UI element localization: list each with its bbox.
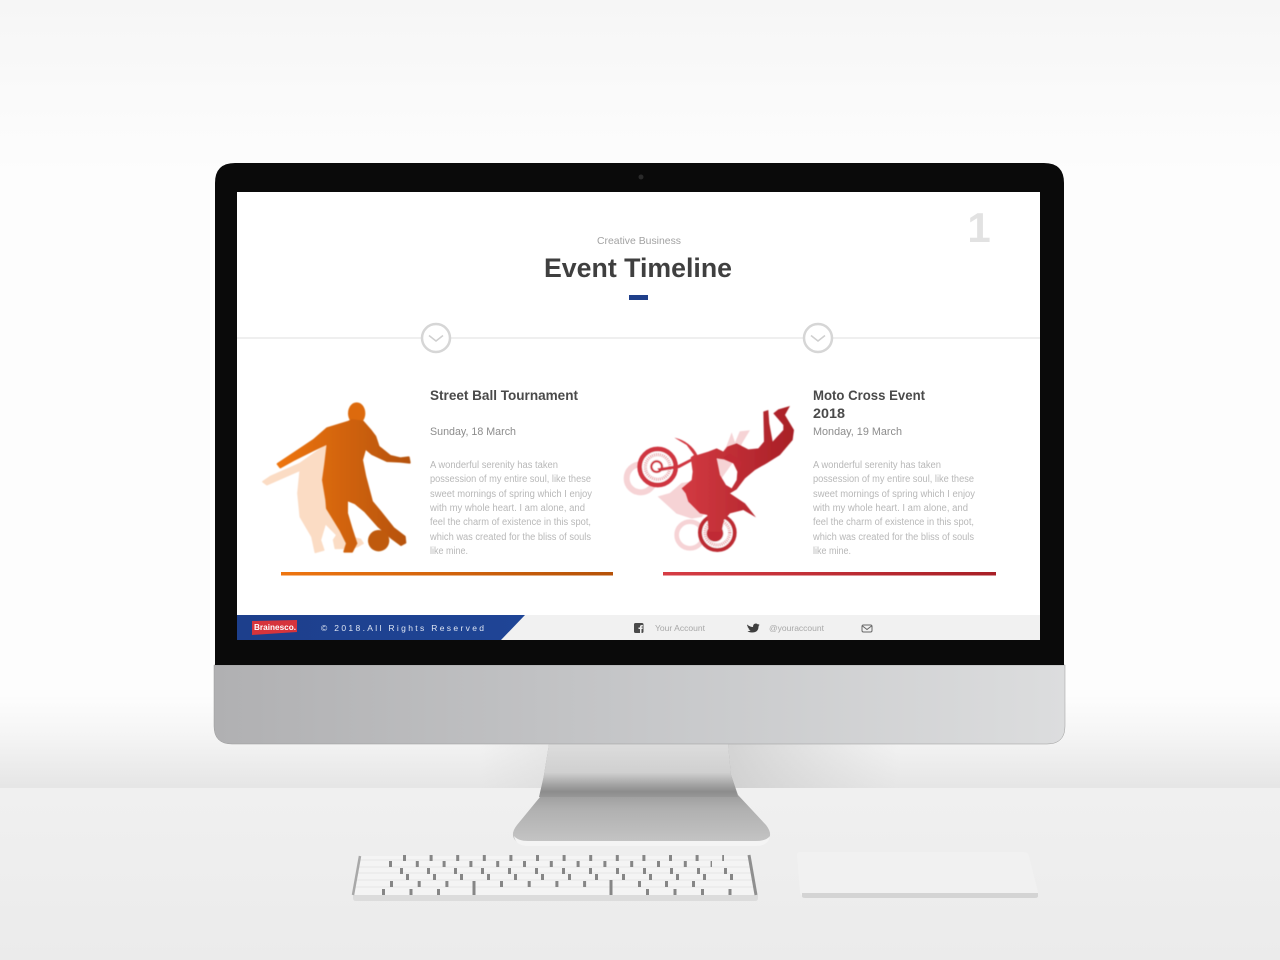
event 2 text: possession of my entire soul, like these [813,474,974,485]
keyboard [353,855,758,901]
title accent bar [629,295,648,300]
event 1 text: with my whole heart. I am alone, and [429,503,585,514]
event 1 text: which was created for the bliss of souls [429,532,591,543]
screen slide [237,192,1040,640]
event 2 text: feel the charm of existence in this spot, [813,517,974,528]
event 1 text: Street Ball Tournament [430,387,578,403]
icon: mail [862,625,872,632]
event 2 text: sweet mornings of spring which I enjoy [813,489,975,500]
monitor stand [513,744,770,846]
event 2 text: Monday, 19 March [813,426,902,438]
event 2 text: A wonderful serenity has taken [813,460,941,471]
account label: Your Account [655,623,706,633]
title: Event Timeline [544,253,732,283]
event 1 text [429,387,592,557]
event 2 underline [663,572,996,576]
twitter handle: @youraccount [769,623,825,633]
monitor body [214,163,1065,744]
icon: football player silhouette [263,402,410,552]
subtitle: Creative Business [597,235,681,247]
event 1 text: possession of my entire soul, like these [430,474,591,485]
icon: motocross silhouette [627,406,794,550]
event 2 text [812,387,975,557]
event 2 text: 2018 [813,405,845,421]
event 1 text: Sunday, 18 March [430,426,516,438]
copyright: © 2018.All Rights Reserved [321,623,484,633]
event 1 text: A wonderful serenity has taken [430,460,558,471]
event 2 text: which was created for the bliss of souls [812,532,974,543]
footer bar [237,615,1040,640]
brand badge [252,620,297,635]
slide number: 1 [967,204,991,251]
icon: facebook [634,623,644,633]
icon: twitter [747,624,760,632]
timeline with markers [237,324,1040,352]
event 1 underline [281,572,613,576]
trackpad [797,852,1038,898]
event 2 text: like mine. [813,546,851,557]
event 2 text: Moto Cross Event [813,387,925,403]
event 1 text: like mine. [430,546,468,557]
event 1 text: sweet mornings of spring which I enjoy [430,489,592,500]
event 2 text: with my whole heart. I am alone, and [812,503,968,514]
event 1 text: feel the charm of existence in this spot, [430,517,591,528]
brand badge: Brainesco. [254,623,296,632]
